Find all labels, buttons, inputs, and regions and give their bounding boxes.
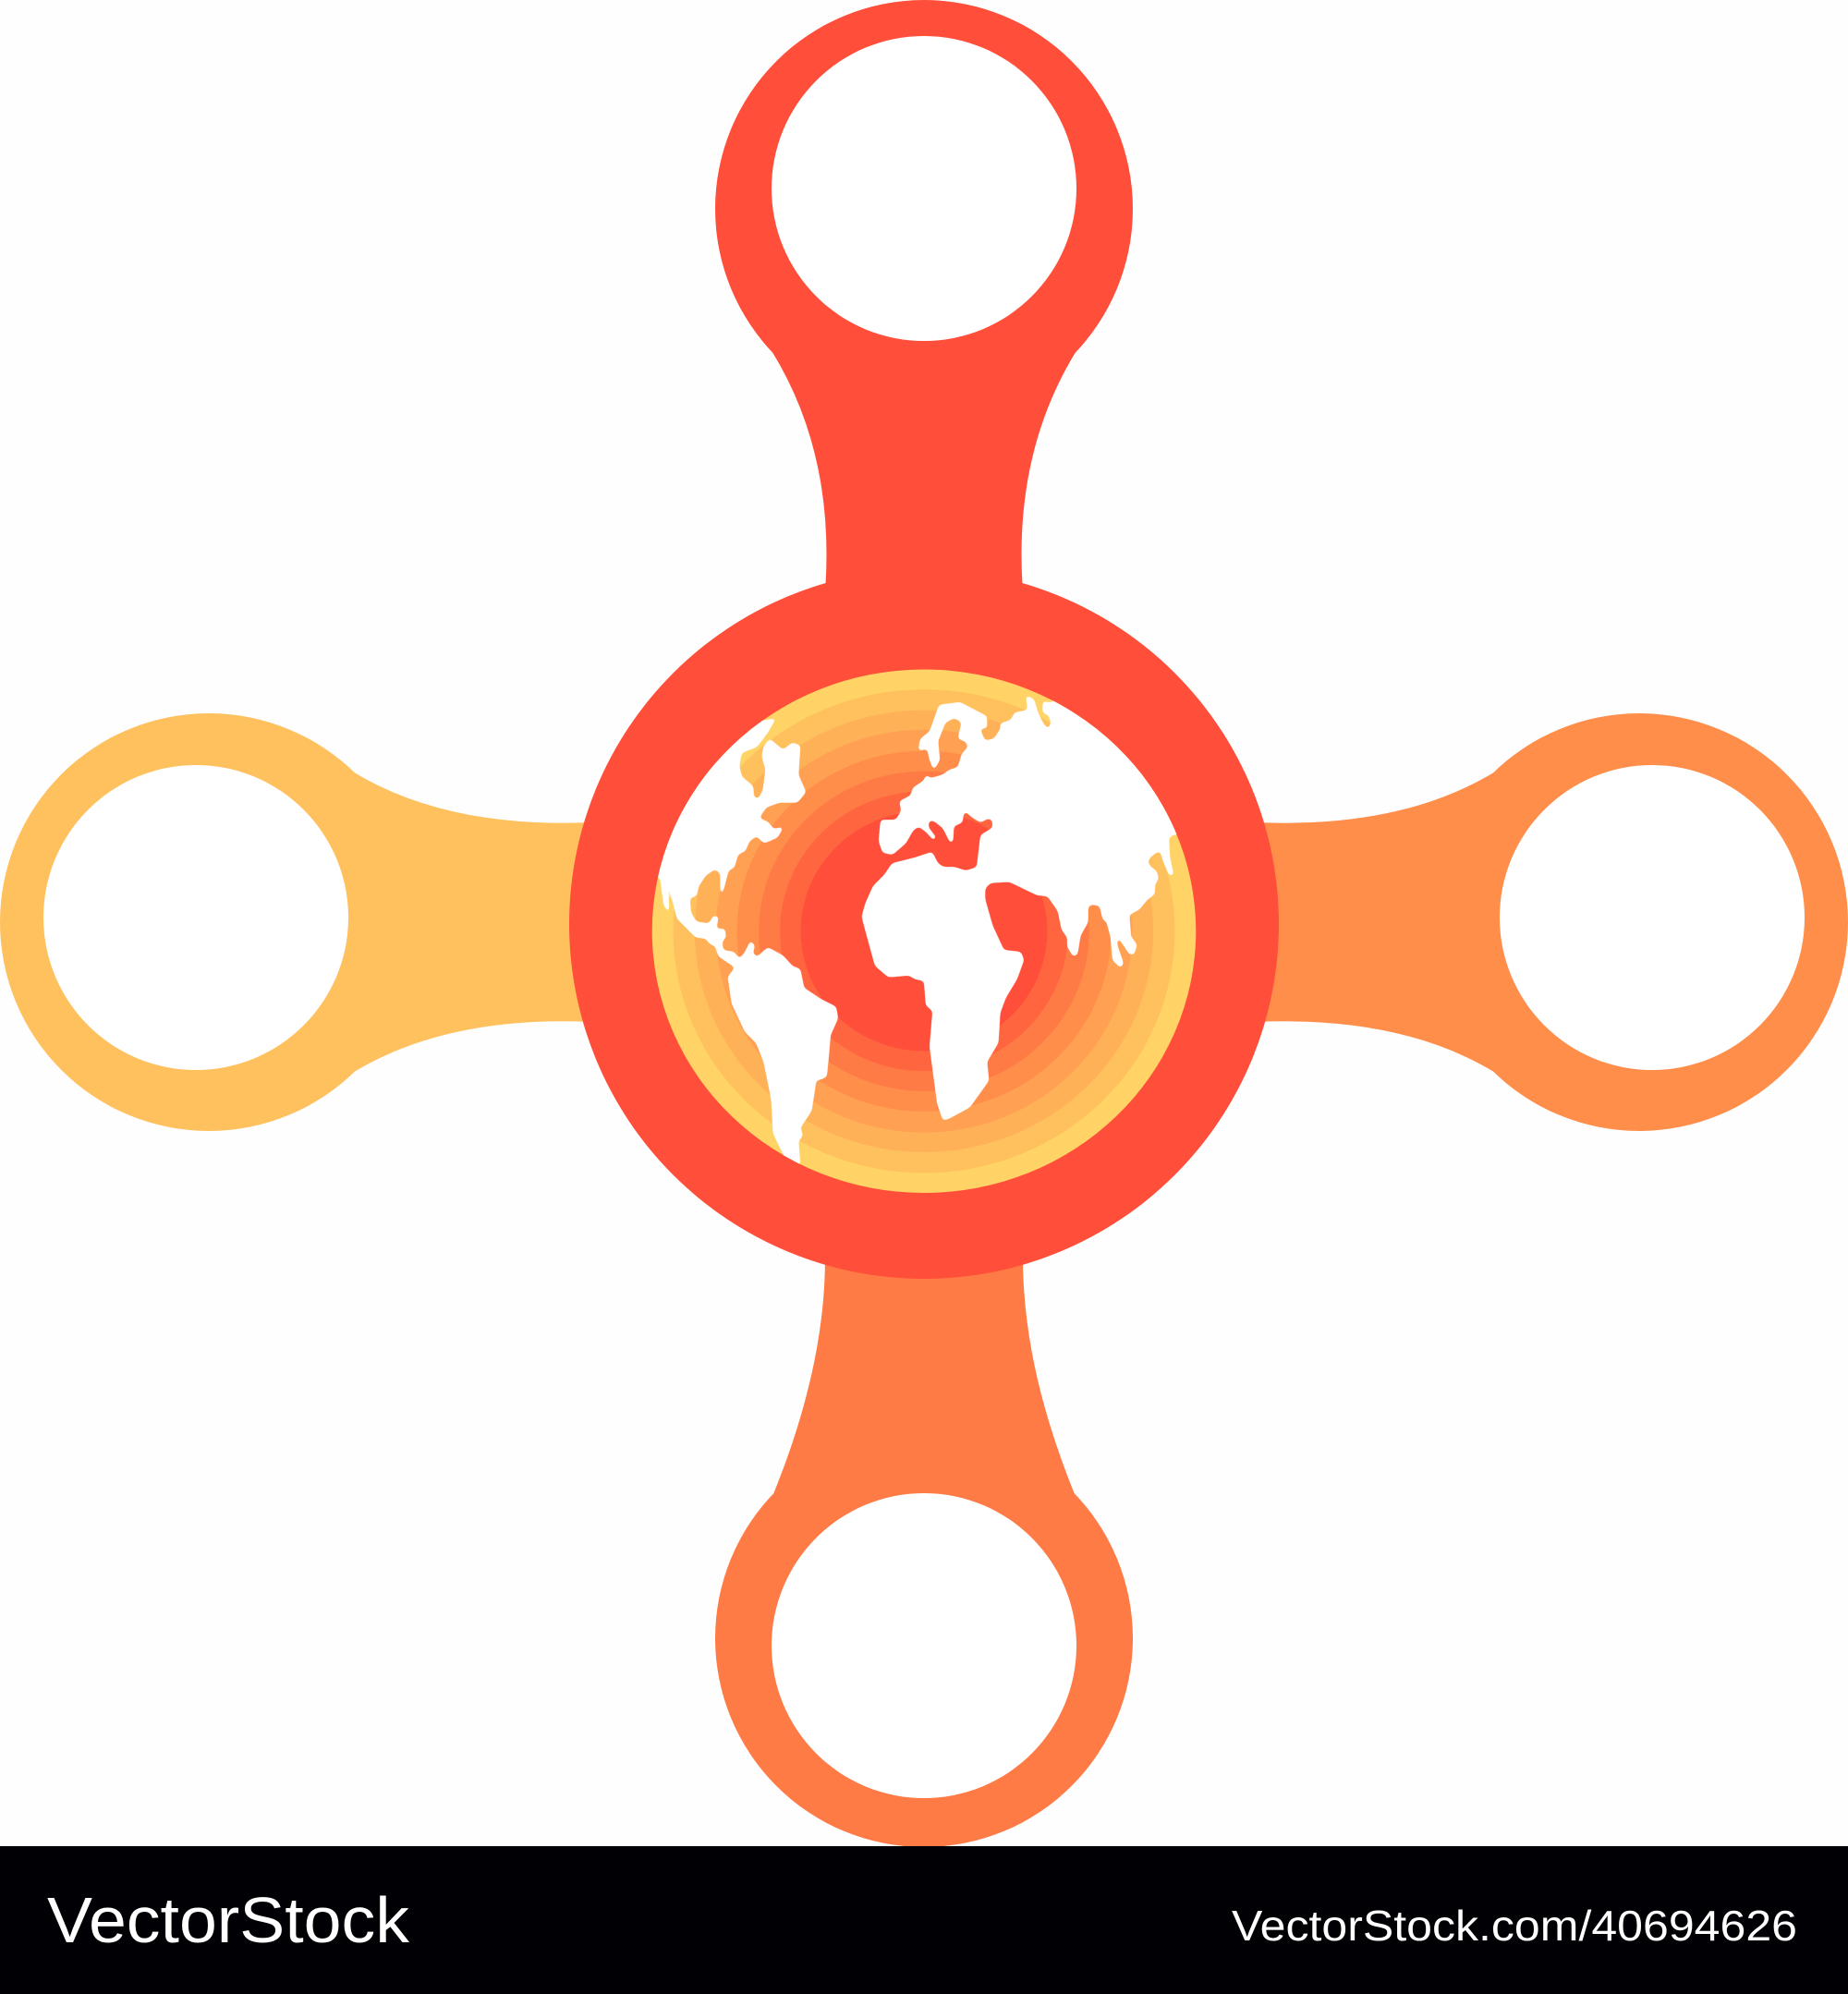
arm: bottom deep orange node: [715, 1257, 1133, 1847]
footer logo text: VectorStock: [47, 1884, 410, 1956]
arm: right orange node: [1257, 713, 1848, 1131]
land: Americas and Greenland: [628, 685, 838, 1165]
central red ring: [569, 569, 1279, 1279]
footer bar: [0, 1846, 1848, 1994]
land: Eurasia and Africa: [862, 677, 1239, 1120]
globe with heat rings and continents: [652, 669, 1196, 1193]
arm: left yellow node: [0, 713, 591, 1131]
footer image id text: VectorStock.com/40694626: [1232, 1902, 1797, 1950]
continents: [658, 697, 1177, 1164]
arm: top red node: [715, 0, 1133, 591]
concentric heat rings: [652, 669, 1196, 1193]
